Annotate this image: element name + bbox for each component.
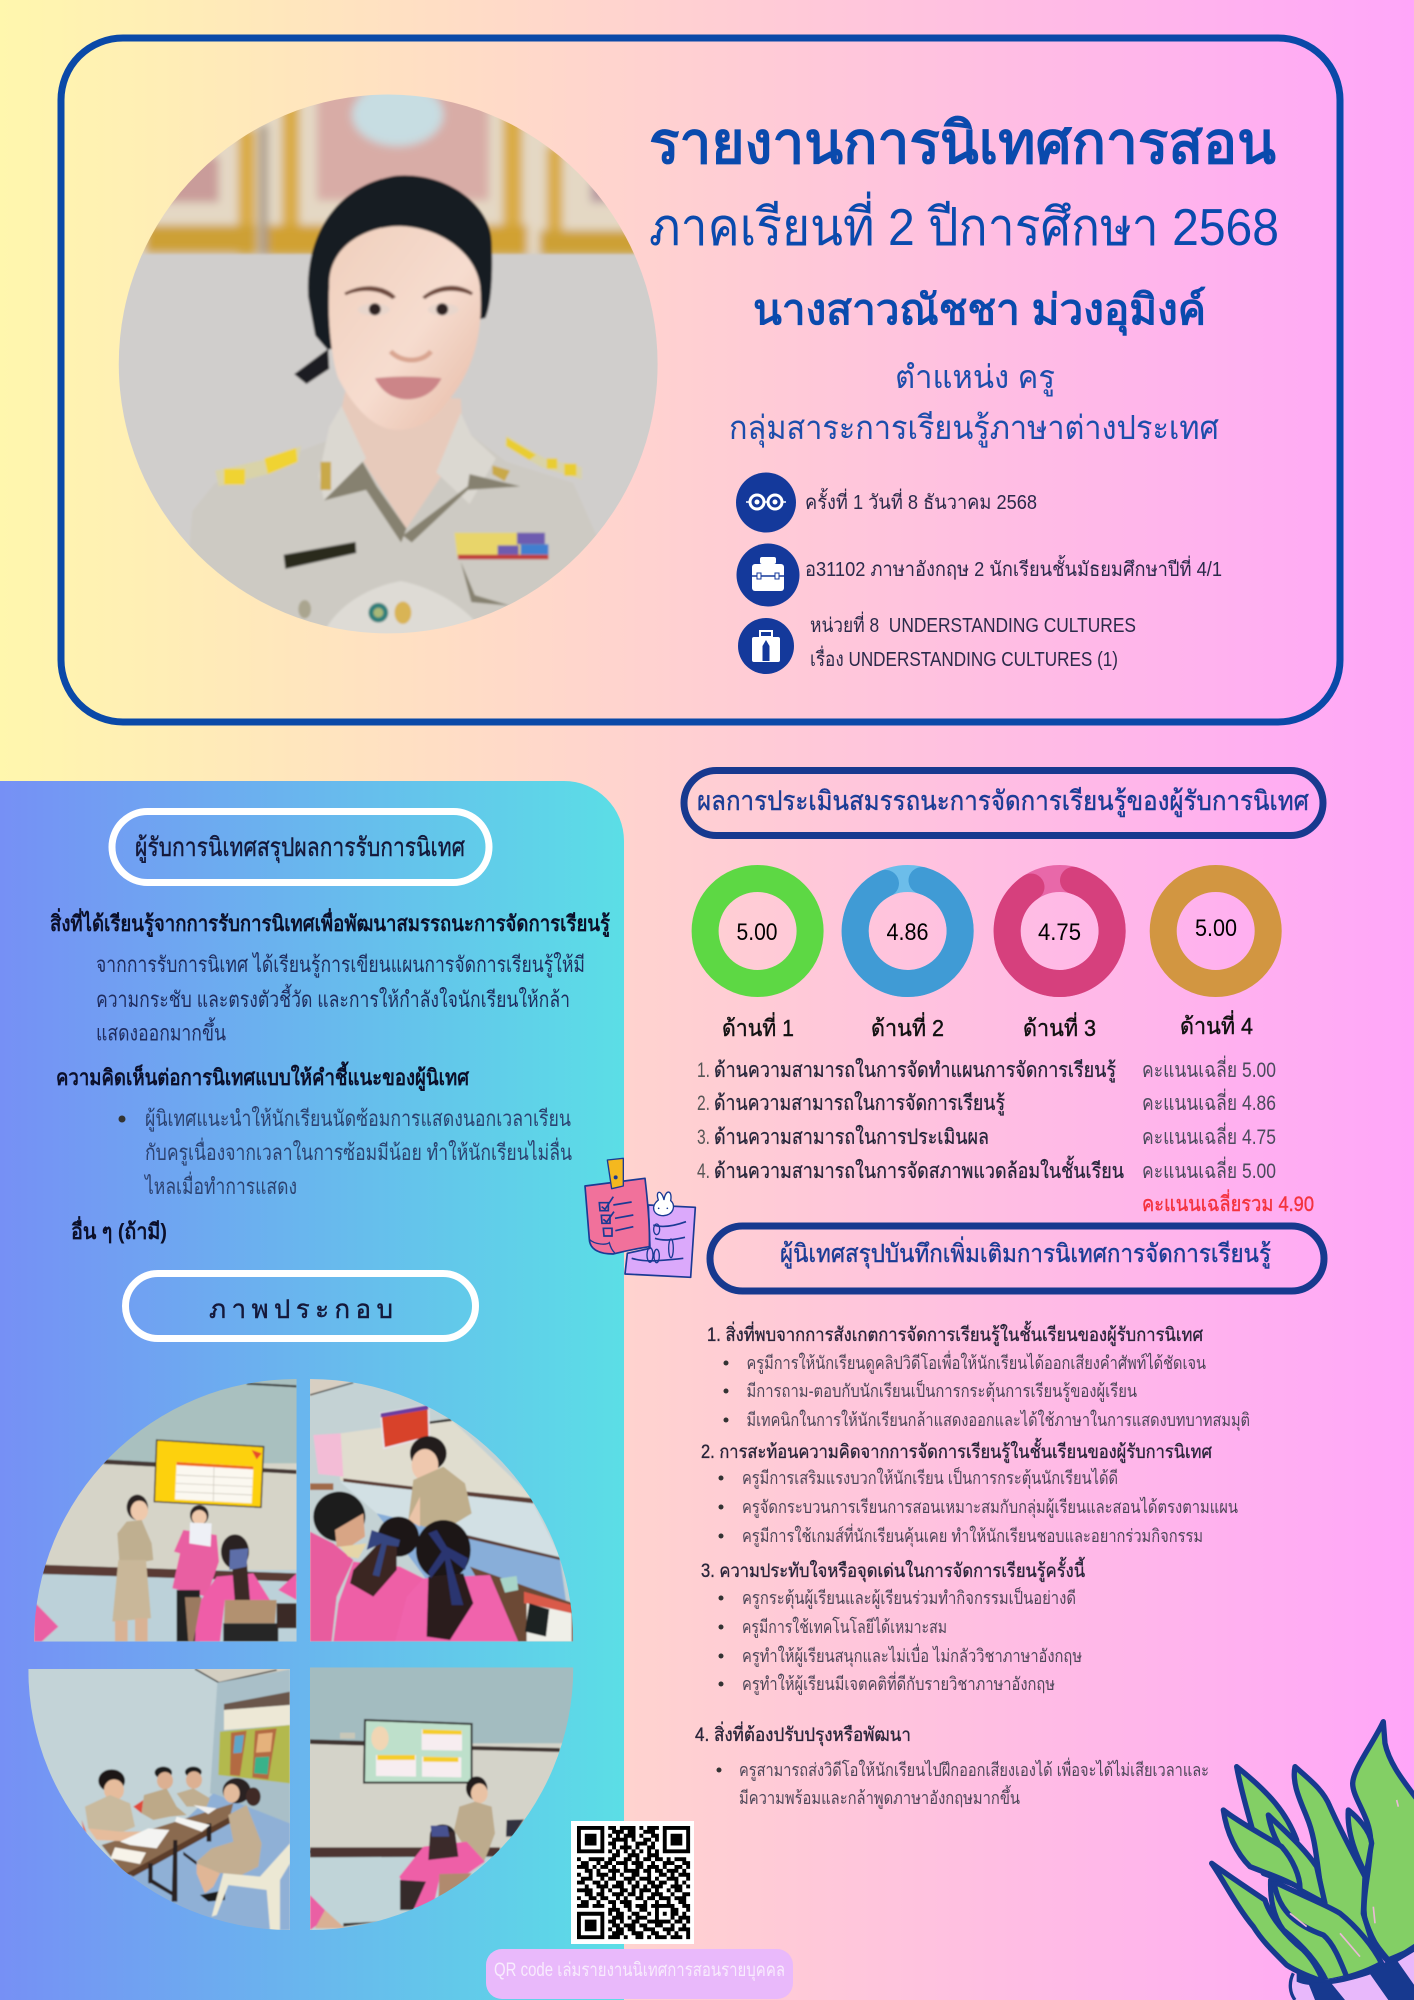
table [102, 1803, 233, 1877]
notes section 3: ครูมีการใช้เทคโนโลยีได้เหมาะสม [742, 1616, 947, 1638]
shoulder boards [215, 446, 301, 486]
illustration: sticky notes [585, 1158, 695, 1277]
heading pill: illustrations: ภาพประกอบ [209, 1294, 393, 1324]
notes section 2: ครูมีการใช้เกมส์ที่นักเรียนคุ้นเคย ทำให้นักเรียนชอบและอยากร่วมกิจกรรม [742, 1523, 1203, 1547]
bullet list: opinion: ผู้นิเทศแนะนำให้นักเรียนนัดซ้อมการแสดงนอกเวลาเรียน [145, 1106, 571, 1132]
heading pill: supervisor notes [710, 1226, 1324, 1291]
purple note [625, 1205, 695, 1277]
score list: คะแนนเฉลี่ย 5.00 [1142, 1055, 1276, 1082]
notes section 3: 3. ความประทับใจหรือจุดเด่นในการจัดการเรียนรู้ครั้งนี้ [701, 1557, 1085, 1583]
score list [697, 1055, 1276, 1183]
score list: 2. [697, 1092, 710, 1115]
department: กลุ่มสาระการเรียนรู้ภาษาต่างประเทศ [729, 409, 1219, 448]
pink checklist [585, 1178, 649, 1254]
notes section 2: ครูจัดกระบวนการเรียนการสอนเหมาะสมกับกลุ่มผู้เรียนและสอนได้ตรงตามแผน [742, 1496, 1238, 1518]
notes section 3: ครูทำให้ผู้เรียนสนุกและไม่เบื่อ ไม่กลัววิชาภาษาอังกฤษ [742, 1643, 1082, 1667]
title: รายงานการนิเทศการสอน [649, 111, 1276, 176]
heading pill: assessment results [684, 770, 1323, 836]
notes section 3 [701, 1557, 1085, 1695]
face [329, 226, 481, 430]
right woman [185, 1767, 202, 1777]
bullet list: opinion: กับครูเนื่องจากเวลาในการซ้อมมีน้อย ทำให้นักเรียนไม่ลื่น [145, 1137, 572, 1166]
seated student [399, 1842, 485, 1908]
pocket and badges [461, 562, 510, 606]
notes section 2: ครูมีการเสริมแรงบวกให้นักเรียน เป็นการกระตุ้นนักเรียนได้ดี [742, 1466, 1118, 1489]
score list: ด้านความสามารถในการจัดการเรียนรู้ [714, 1091, 1005, 1116]
heading pill: teacher summary: ผู้รับการนิเทศสรุปผลการรับการนิเทศ [135, 832, 465, 863]
heading: what was learned: สิ่งที่ได้เรียนรู้จากการรับการนิเทศเพื่อพัฒนาสมรรถนะการจัดการเรียนรู้ [50, 907, 610, 938]
donut labels: ด้านที่ 2 [871, 1012, 944, 1041]
teacher name: นางสาวณัชชา ม่วงอุมิงค์ [753, 286, 1206, 336]
subject text: อ31102 ภาษาอังกฤษ 2 นักเรียนชั้นมัธยมศึกษาปีที่ 4/1 [805, 555, 1222, 581]
ribbons [454, 532, 522, 557]
photo: supervisors meeting [28, 1669, 290, 1930]
name tag [284, 542, 356, 569]
position: ตำแหน่ง ครู [895, 359, 1055, 397]
paragraph: what was learned: ความกระชับ และตรงตัวชี้วัด และการให้กำลังใจนักเรียนให้กล้า [96, 984, 570, 1012]
girl front [395, 1575, 518, 1642]
notes section 4: ครูสามารถส่งวิดีโอให้นักเรียนไปฝึกออกเสียงเองได้ เพื่อจะได้ไม่เสียเวลาและ [739, 1757, 1209, 1781]
paragraph: what was learned [96, 952, 585, 1046]
notes section 1: มีเทคนิกในการให้นักเรียนกล้าแสดงออกและได้ใช้ภาษาในการแสดงบทบาทสมมุติ [746, 1409, 1250, 1431]
bunny clip [654, 1192, 674, 1216]
icon: glasses [736, 472, 796, 532]
donut chart: aspect 3 [1007, 878, 1112, 984]
notes section 1: ครูมีการให้นักเรียนดูคลิปวิดีโอเพื่อให้นักเรียนได้ออกเสียงคำศัพท์ได้ชัดเจน [746, 1350, 1206, 1374]
panel: header frame [61, 38, 1340, 722]
donut chart: aspect 4 [1163, 878, 1268, 984]
score list: คะแนนเฉลี่ย 4.75 [1142, 1122, 1276, 1149]
total score: คะแนนเฉลี่ยรวม 4.90 [1142, 1189, 1314, 1216]
lesson text: เรื่อง UNDERSTANDING CULTURES (1) [810, 645, 1118, 671]
donut chart: aspect 2 [855, 878, 960, 984]
heading pill: supervisor notes: ผู้นิเทศสรุปบันทึกเพิ่มเติมการนิเทศการจัดการเรียนรู้ [780, 1236, 1271, 1269]
paragraph: what was learned: จากการรับการนิเทศ ได้เรียนรู้การเขียนแผนการจัดการเรียนรู้ให้มี [96, 952, 585, 978]
notes section 2 [701, 1438, 1238, 1547]
notes section 3: ครูกระตุ้นผู้เรียนและผู้เรียนร่วมทำกิจกรรมเป็นอย่างดี [742, 1586, 1076, 1609]
student standing [190, 1505, 209, 1525]
subtitle: semester: ภาคเรียนที่ 2 ปีการศึกษา 2568 [649, 191, 1279, 257]
girl middle [333, 1562, 427, 1642]
date text: ครั้งที่ 1 วันที่ 8 ธันวาคม 2568 [805, 488, 1037, 514]
left man [98, 1769, 125, 1792]
bullet list: opinion: ไหลเมื่อทำการแสดง [143, 1171, 297, 1199]
photo: teacher in front of screen [300, 1660, 580, 1933]
heading: opinion: ความคิดเห็นต่อการนิเทศแบบให้คำชี้แนะของผู้นิเทศ [56, 1061, 470, 1092]
QR caption: QR code เล่มรายงานนิเทศการสอนรายบุคคล [494, 1960, 785, 1982]
teacher [127, 1495, 148, 1520]
donut labels: ด้านที่ 3 [1023, 1012, 1096, 1041]
teacher [410, 1436, 447, 1471]
donut chart: aspect 4: 5.00 [1195, 915, 1237, 942]
notes section 4 [695, 1721, 1209, 1809]
notes section 4: 4. สิ่งที่ต้องปรับปรุงหรือพัฒนา [695, 1721, 911, 1747]
photo: classroom presentation [34, 1379, 297, 1642]
student seated [195, 1573, 270, 1642]
icon: case with pencil [738, 618, 794, 674]
seated teacher [223, 1778, 251, 1803]
heading pill: assessment results: ผลการประเมินสมรรถนะการจัดการเรียนรู้ของผู้รับการนิเทศ [697, 786, 1309, 817]
notes section 3: ครูทำให้ผู้เรียนมีเจตคติที่ดีกับรายวิชาภาษาอังกฤษ [742, 1671, 1055, 1695]
notes section 4: มีความพร้อมและกล้าพูดภาษาอังกฤษมากขึ้น [739, 1785, 1020, 1809]
table and items [470, 1567, 573, 1642]
middle woman [155, 1767, 172, 1779]
score list: คะแนนเฉลี่ย 4.86 [1142, 1088, 1276, 1115]
panel: left teacher summary [0, 781, 624, 2000]
photo: portrait of teacher [110, 83, 660, 641]
uniform [192, 444, 594, 626]
teacher [466, 1776, 487, 1800]
notes section 1: มีการถาม-ตอบกับนักเรียนเป็นการกระตุ้นการเรียนรู้ของผู้เรียน [746, 1379, 1137, 1402]
photo: teacher helping students [310, 1379, 574, 1642]
icon: bag [736, 544, 800, 606]
yellow clip [607, 1158, 623, 1189]
donut chart: aspect 3: 4.75 [1038, 919, 1081, 946]
score list: 1. [697, 1059, 710, 1082]
notes section 1 [707, 1321, 1250, 1431]
score list: ด้านความสามารถในการประเมินผล [714, 1125, 989, 1149]
bullet list: opinion [118, 1106, 572, 1199]
score list: คะแนนเฉลี่ย 5.00 [1142, 1156, 1276, 1183]
donut labels [722, 1010, 1253, 1041]
lower wall & floor [340, 1482, 560, 1557]
score list: ด้านความสามารถในการจัดทำแผนการจัดการเรียนรู้ [714, 1058, 1116, 1083]
donut chart: aspect 1 [705, 878, 810, 984]
illustration: plant [1212, 1722, 1414, 2000]
unit text: หน่วยที่ 8 UNDERSTANDING CULTURES [810, 611, 1136, 637]
score list: 3. [697, 1126, 710, 1149]
neck [338, 392, 464, 529]
score list: 4. [697, 1160, 710, 1183]
heading pill: illustrations [126, 1274, 476, 1338]
heading: others: อื่น ๆ (ถ้ามี) [71, 1215, 167, 1244]
chair [212, 1843, 290, 1930]
donut labels: ด้านที่ 4 [1180, 1010, 1253, 1039]
notes section 1: 1. สิ่งที่พบจากการสังเกตการจัดการเรียนรู้ในชั้นเรียนของผู้รับการนิเทศ [707, 1321, 1203, 1346]
hair [308, 175, 492, 350]
donut chart: aspect 1: 5.00 [736, 919, 778, 946]
boy [310, 1532, 353, 1642]
donut chart: aspect 2: 4.86 [886, 919, 928, 946]
notes section 2: 2. การสะท้อนความคิดจากการจัดการเรียนรู้ในชั้นเรียนของผู้รับการนิเทศ [701, 1438, 1212, 1463]
QR caption [486, 1949, 793, 1999]
paragraph: what was learned: แสดงออกมากขึ้น [96, 1018, 226, 1046]
heading pill: teacher summary [112, 812, 489, 882]
QR code [571, 1821, 694, 1944]
donut labels: ด้านที่ 1 [722, 1012, 794, 1041]
score list: ด้านความสามารถในการจัดสภาพแวดล้อมในชั้นเรียน [714, 1156, 1124, 1183]
